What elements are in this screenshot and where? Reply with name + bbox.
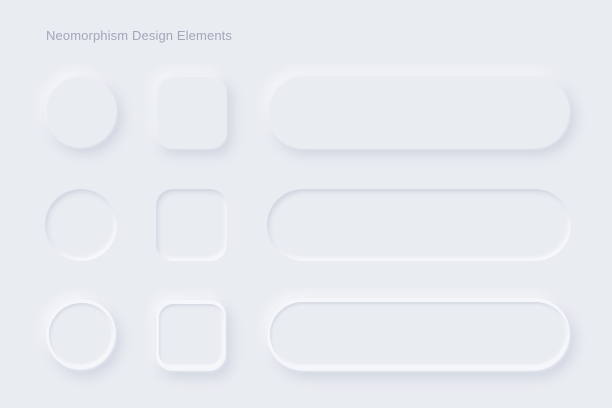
sunken rounded square: [156, 189, 227, 261]
raised circle: [45, 75, 118, 149]
sunken pill: [267, 189, 571, 261]
ring rounded square: [156, 300, 227, 373]
ring pill: [267, 298, 571, 373]
raised rounded square: [156, 76, 228, 150]
raised pill: [267, 75, 571, 150]
ring pill inner: [270, 302, 568, 367]
ring square inner: [159, 304, 224, 367]
sunken circle: [45, 189, 117, 261]
ring circle: [46, 299, 117, 372]
title: Neomorphism Design Elements: [46, 28, 232, 43]
ring circle inner: [49, 303, 114, 367]
